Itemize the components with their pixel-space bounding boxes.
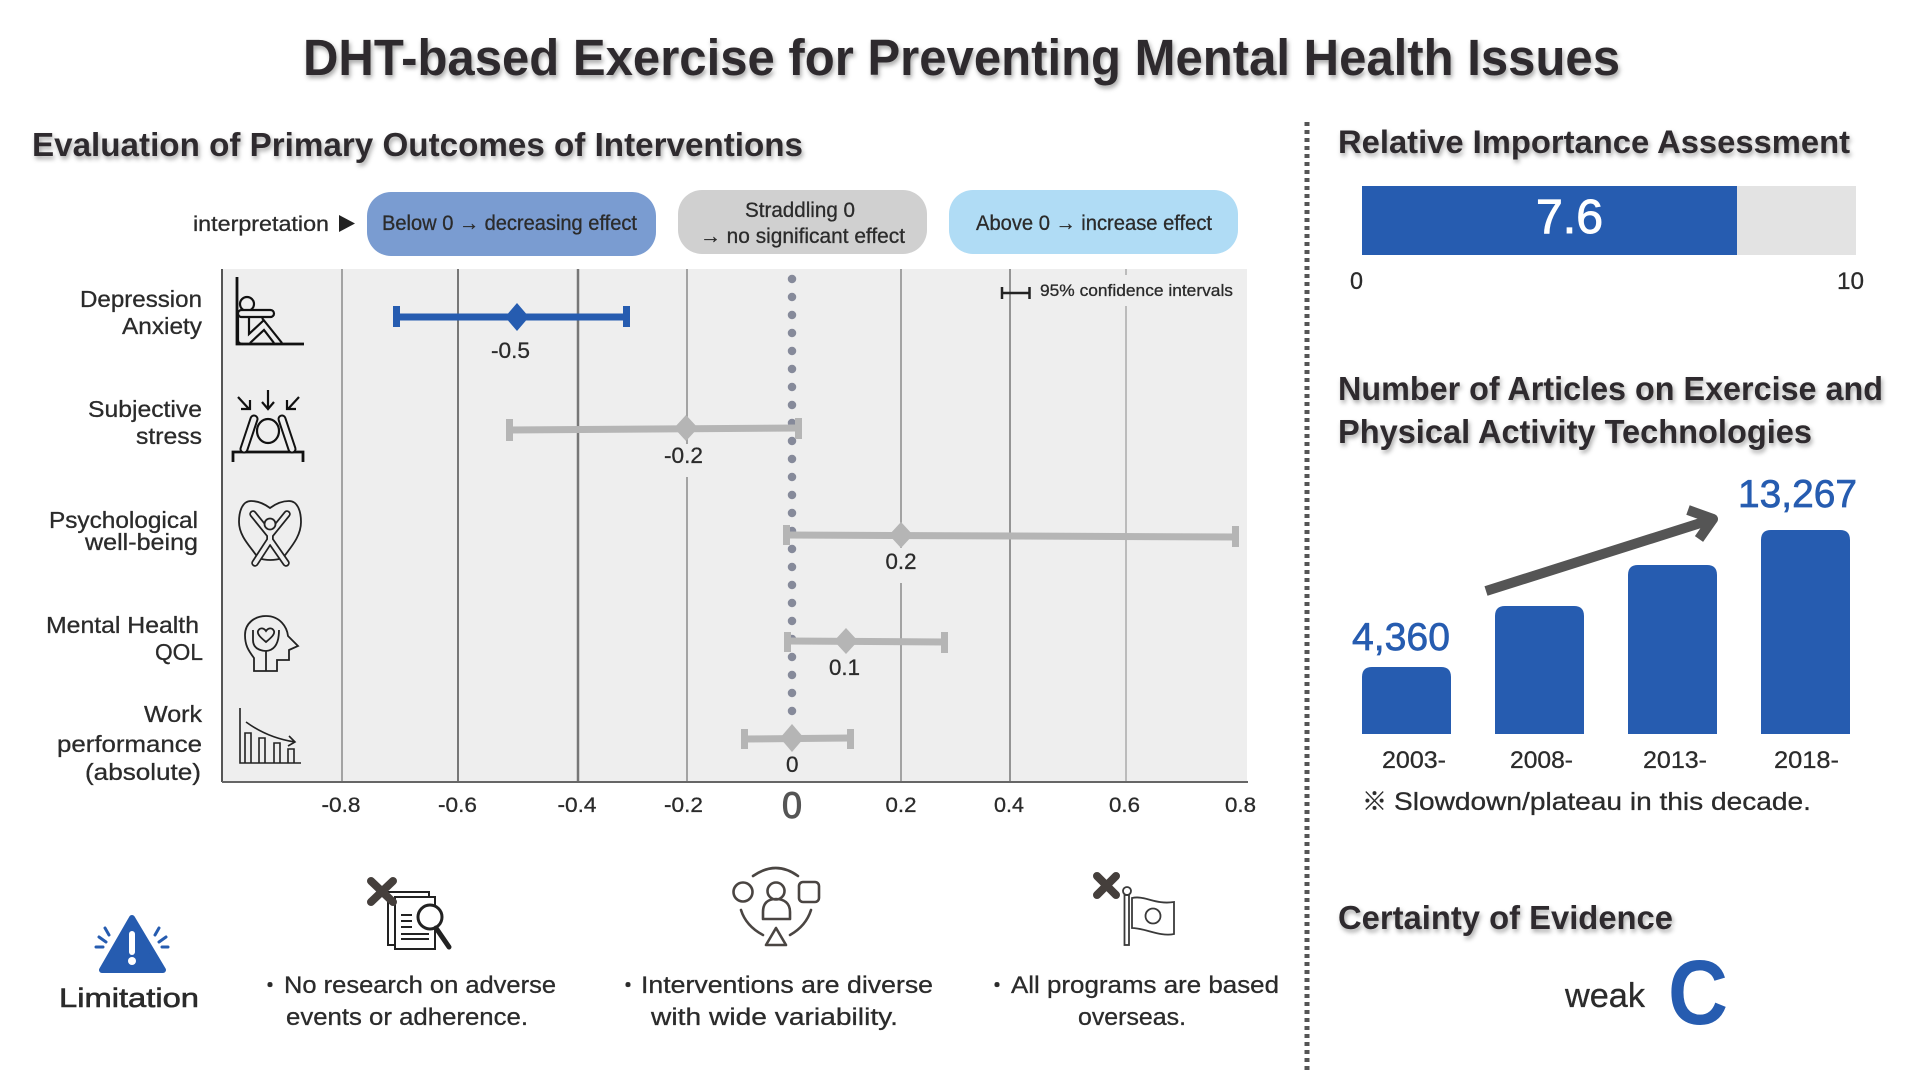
limitation: diverse interventions: ・ [616,972,640,998]
label: mental health QOL [46,612,203,665]
label: work performance [57,701,203,785]
panel: relative importance assessment [1338,124,1864,295]
x axis labels [322,785,1256,826]
pill: straddling 0: → no significant effect [700,225,905,248]
label: subjective stress: stress [136,423,202,449]
icon: pointer triangle [339,215,355,232]
divider [1304,122,1310,1070]
icon: person sitting against wall [237,277,304,344]
x axis labels: 0.8 [1225,793,1256,817]
note: slowdown: Slowdown/plateau in this decade. [1394,788,1811,816]
heading: number of articles: Physical Activity Technologies [1338,413,1812,450]
label: work performance: Work [144,701,203,727]
scale labels: 10 [1837,268,1864,295]
x axis labels: 0 [782,785,802,826]
x axis labels: -0.6 [438,793,477,817]
year labels: 2008- [1510,747,1573,774]
pill: above 0: Above 0 → increase effect [976,212,1212,235]
icon: stress arrows over person [233,390,303,462]
heading: certainty of evidence: Certainty of Evidence [1338,899,1673,936]
limitation: diverse interventions [616,868,933,1031]
heading: number of articles: Number of Articles on Exercise and [1338,370,1883,407]
label: psychological well-being: well-being [84,529,198,555]
panel: number of articles [1338,370,1883,816]
row: subjective stress interval [506,415,802,468]
grade: C: C [1668,942,1728,1044]
row: psychological well-being interval [783,522,1239,574]
label: work performance: (absolute) [85,759,201,785]
scale labels [1350,268,1864,295]
row: mental health QOL interval: 0.1 [829,655,860,680]
x axis labels: 0.6 [1109,793,1140,817]
row: psychological well-being interval: 0.2 [886,549,916,574]
limitation: overseas programs: ・ [986,972,1008,998]
pill: straddling 0 [678,190,927,254]
heading: evaluation of primary outcomes: Evaluation of Primary Outcomes of Interventions [32,127,803,164]
arrow: upward trend [1486,510,1713,591]
panel: limitations [59,868,1279,1031]
label: weak: weak [1564,977,1646,1015]
value: 4,360: 4,360 [1352,616,1450,659]
x axis labels: -0.2 [664,793,703,817]
row: depression anxiety interval [393,303,630,363]
label: subjective stress [88,396,202,449]
scale labels: 0 [1350,268,1363,295]
icon: declining bars [240,708,301,763]
limitation: diverse interventions: with wide variability. [650,1004,898,1031]
icon: warning triangle [96,918,168,970]
legend: 95% confidence intervals: 95% confidence intervals [1040,281,1233,300]
year labels: 2018- [1774,747,1839,774]
limitation: no research: No research on adverse [284,972,556,999]
x axis labels: -0.4 [558,793,597,817]
pill: below 0: Below 0 → decreasing effect [382,212,637,235]
panel: certainty of evidence [1338,899,1728,1044]
pill: above 0 [949,190,1238,254]
x axis labels: 0.4 [994,793,1024,817]
note: slowdown: ※ [1362,788,1387,816]
icon: head with heart [245,616,298,671]
forest plot chart [222,269,1256,826]
limitation: diverse interventions: Interventions are diverse [641,972,933,999]
value: 13,267: 13,267 [1738,473,1857,516]
row: subjective stress interval: -0.2 [664,443,703,468]
label: mental health QOL: QOL [155,639,203,665]
limitation: no research [258,881,556,1031]
title: DHT-based Exercise for Preventing Mental Health Issues [303,29,1620,86]
limitation: no research: ・ [258,972,282,998]
icon: person in heart [239,501,301,563]
row: mental health QOL interval [784,628,948,680]
x axis labels: 0.2 [886,793,916,817]
progress bar: 7.6 of 10 [1362,186,1856,255]
interpretation label: interpretation [193,213,329,236]
heading: number of articles [1338,370,1883,450]
bar chart [1362,530,1850,734]
row: depression anxiety interval: -0.5 [491,338,530,363]
limitation: no research: events or adherence. [286,1004,528,1031]
row: work performance interval [741,724,854,777]
label: depression anxiety: Depression [80,286,202,312]
label: subjective stress: Subjective [88,396,202,422]
label: psychological well-being: Psychological [49,507,198,533]
progress bar: 7.6 of 10: 7.6 [1536,191,1603,244]
year labels: 2003- [1382,747,1446,774]
x axis labels: -0.8 [322,793,361,817]
limitation: overseas programs [986,876,1279,1031]
interpretation legend [193,190,1238,256]
label: mental health QOL: Mental Health [46,612,199,638]
limitation: overseas programs: All programs are based [1011,972,1279,999]
limitation: overseas programs: overseas. [1078,1004,1186,1031]
label: depression anxiety: Anxiety [122,313,203,339]
label: psychological well-being [49,507,198,555]
heading: relative importance: Relative Importance Assessment [1338,124,1850,160]
year labels [1382,747,1839,774]
label: limitation: Limitation [59,983,199,1013]
pill: below 0 [367,192,656,256]
label: depression anxiety [80,286,203,339]
pill: straddling 0: Straddling 0 [745,199,855,222]
label: work performance: performance [57,731,202,757]
row: work performance interval: 0 [786,752,798,777]
year labels: 2013- [1643,747,1707,774]
